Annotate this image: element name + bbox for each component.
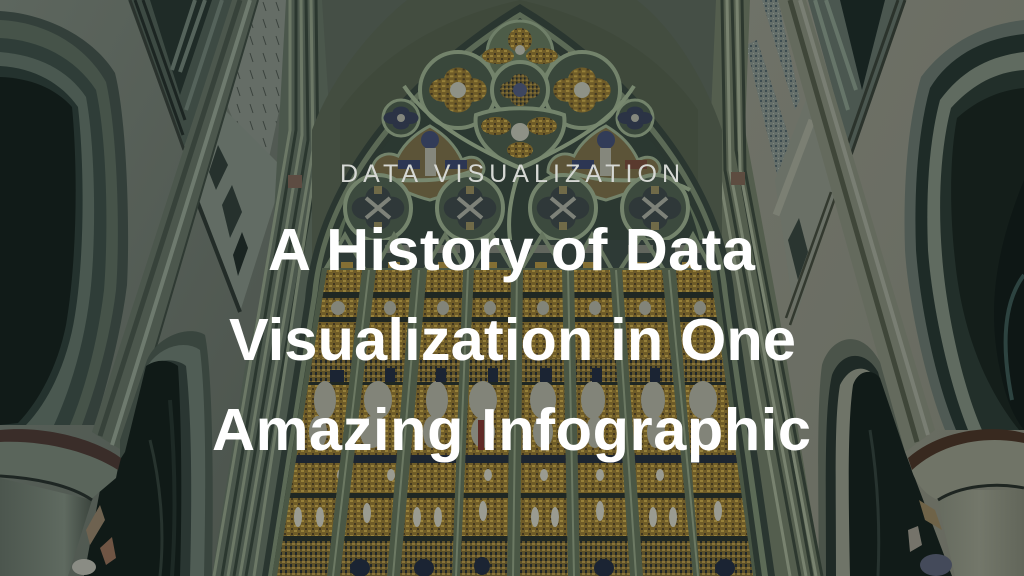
figure panels	[372, 126, 660, 200]
dark niches	[330, 368, 735, 576]
lancet heads	[325, 235, 712, 272]
right wall	[730, 0, 1024, 576]
left lace panel	[225, 0, 295, 190]
right lace panels	[746, 0, 800, 178]
main title	[212, 216, 811, 463]
lancet stained glass	[270, 268, 760, 576]
right lower triforium window	[775, 95, 836, 325]
upper figures	[309, 301, 720, 448]
window tracery stone	[278, 34, 752, 576]
left big arch	[0, 11, 128, 425]
left diagonal shaft	[92, 0, 258, 452]
title line 2: Visualization in One	[229, 306, 796, 373]
left small arch	[120, 331, 213, 576]
upper quatrefoils	[420, 52, 620, 128]
right column shaft	[935, 490, 1024, 576]
title line 3: Amazing Infographic	[212, 396, 811, 463]
right capital and column	[908, 429, 1024, 576]
central vault above window	[312, 0, 722, 290]
small side foils	[383, 100, 653, 136]
left stained glass fragments	[72, 505, 116, 575]
right big arch	[905, 20, 1024, 430]
left arch opening	[0, 77, 76, 425]
window arch mouldings	[262, 4, 775, 576]
left lower triforium window	[195, 110, 285, 312]
left column bundle	[212, 0, 335, 576]
eyebrow heading: DATA VISUALIZATION	[340, 160, 680, 188]
right diagonal shaft	[778, 0, 935, 452]
right upper triforium window	[808, 0, 905, 155]
top trefoil	[460, 21, 580, 87]
left dark void under capital	[84, 361, 181, 576]
left capital and column	[0, 429, 121, 576]
right arch opening	[951, 88, 1024, 430]
right small arch	[818, 339, 952, 576]
right stained glass fragments	[908, 500, 952, 576]
lower trefoil	[476, 108, 564, 168]
left wall	[0, 0, 300, 576]
tracery quatrefoil row	[345, 175, 688, 241]
tracery ribs	[350, 86, 690, 262]
right column bundle	[705, 0, 822, 576]
left wall crack shadow	[130, 0, 184, 150]
lower figures	[294, 469, 722, 527]
title line 1: A History of Data	[268, 216, 756, 283]
window mullions	[272, 268, 756, 576]
left column shaft	[0, 478, 92, 576]
left upper triforium window	[128, 0, 235, 150]
